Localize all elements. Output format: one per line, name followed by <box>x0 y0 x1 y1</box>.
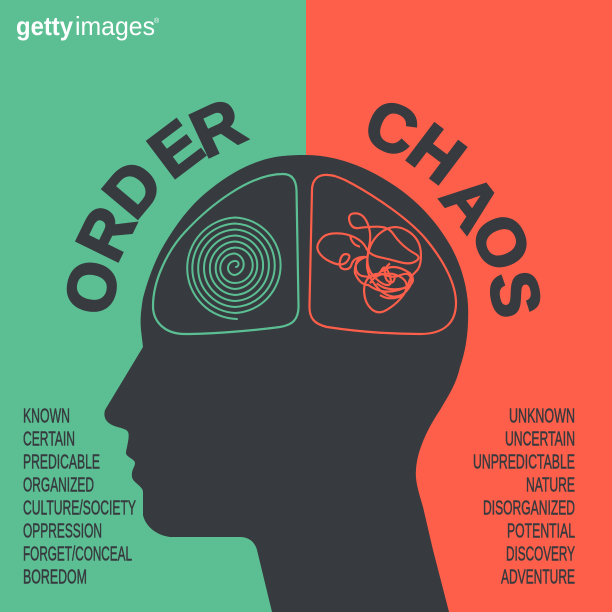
heading: ORDER: R <box>180 84 255 173</box>
heading: ORDER: R <box>62 195 151 272</box>
icon: tangled scribble <box>317 213 421 312</box>
text block: order words: KNOWN <box>23 405 70 428</box>
logo: getty images watermark: getty <box>16 11 73 41</box>
head silhouette <box>104 155 468 612</box>
heading: ORDER: O <box>50 254 135 321</box>
logo: getty images watermark <box>16 11 160 41</box>
heading: CHAOS <box>354 84 555 323</box>
heading: CHAOS: C <box>354 84 428 172</box>
panel: chaos background <box>306 0 612 612</box>
text block: order words: CERTAIN <box>23 428 75 451</box>
logo: getty images watermark: images <box>75 11 155 41</box>
text block: order words: OPPRESSION <box>23 520 102 543</box>
text block: chaos words: NATURE <box>526 474 575 497</box>
text block: order words: BOREDOM <box>23 566 87 589</box>
text block: order words: PREDICABLE <box>23 451 100 474</box>
heading: ORDER: D <box>89 146 177 232</box>
right brain outline <box>309 175 456 334</box>
text block: order words: ORGANIZED <box>23 474 94 497</box>
left brain outline <box>153 174 299 334</box>
text block: chaos words <box>473 405 575 589</box>
heading: CHAOS: O <box>456 204 545 282</box>
icon: ordered spiral <box>187 218 281 319</box>
heading: CHAOS: S <box>474 266 555 323</box>
heading: ORDER: E <box>135 106 216 193</box>
heading: CHAOS: H <box>394 110 478 199</box>
text block: order words: FORGET/CONCEAL <box>23 543 132 566</box>
heading: ORDER <box>50 84 255 321</box>
heading: CHAOS: A <box>426 161 515 245</box>
logo: getty images watermark: ® <box>154 17 160 25</box>
text block: order words: CULTURE/SOCIETY <box>23 497 136 520</box>
text block: order words <box>23 405 136 589</box>
panel: order background <box>0 0 306 612</box>
